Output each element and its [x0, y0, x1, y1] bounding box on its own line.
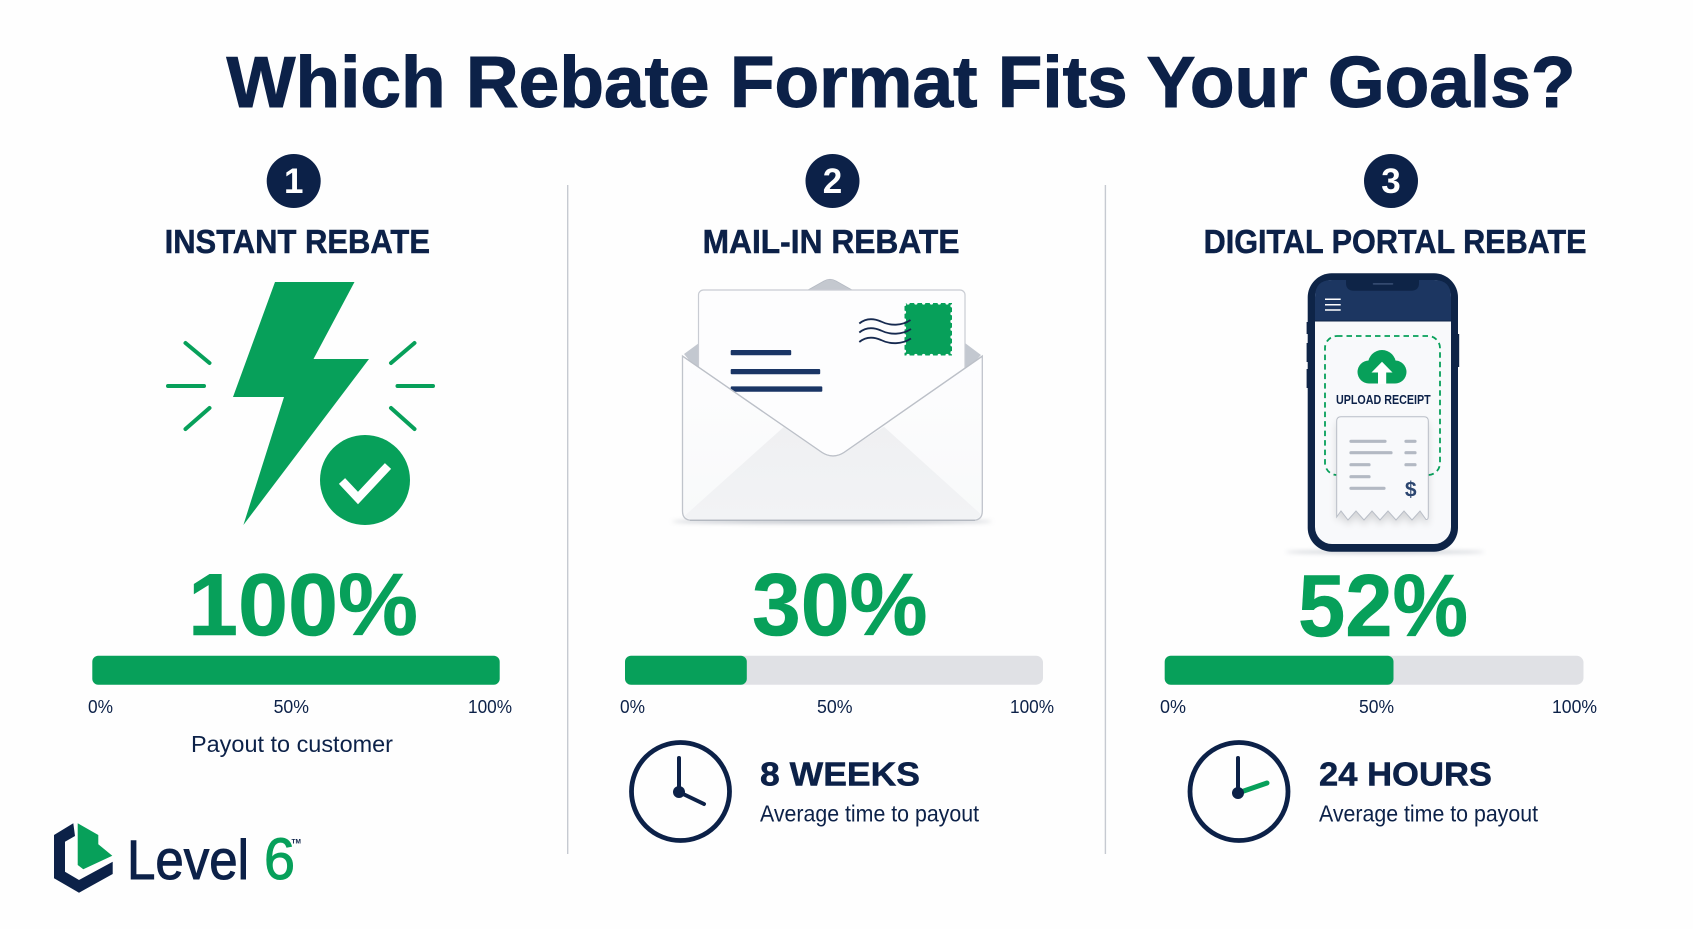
logo: Level 6: TM	[292, 838, 301, 846]
divider left	[567, 185, 568, 854]
icon: phone with upload receipt	[1285, 273, 1485, 554]
axis labels: 0%	[1160, 696, 1186, 717]
payout time: 24 hours: Average time to payout	[1319, 800, 1539, 826]
stat: 100%: 100%	[188, 555, 418, 654]
axis labels: 50%	[1359, 696, 1394, 717]
axis labels: 50%	[274, 696, 309, 717]
heading: digital portal rebate: DIGITAL PORTAL REBATE	[1204, 223, 1587, 260]
axis labels	[1160, 696, 1597, 717]
number badge 2	[806, 154, 860, 208]
caption: payout to customer: Payout to customer	[191, 731, 393, 757]
axis labels	[620, 696, 1054, 717]
axis labels: 100%	[468, 696, 512, 717]
icon: clock twenty-four hours	[1190, 742, 1288, 840]
icon: clock eight weeks	[632, 742, 730, 840]
icon: lightning bolt with check	[168, 282, 433, 525]
payout time: 24 hours: 24 HOURS	[1319, 756, 1492, 793]
number badge 1: 1	[284, 162, 303, 201]
progress bar: 52%	[1165, 656, 1584, 685]
divider right	[1105, 185, 1106, 854]
icon: envelope with letter	[672, 279, 992, 523]
payout time: 24 hours	[1319, 756, 1539, 826]
axis labels: 100%	[1010, 696, 1054, 717]
stat: 52%: 52%	[1298, 556, 1468, 655]
logo: Level 6: 6	[264, 827, 295, 892]
title: Which Rebate Format Fits Your Goals?	[226, 43, 1576, 123]
panel: mail-in rebate	[620, 154, 1054, 840]
payout time: 8 weeks: Average time to payout	[760, 800, 980, 826]
logo: Level 6	[54, 823, 301, 893]
panel: instant rebate	[88, 154, 512, 757]
progress bar: 100%	[92, 656, 500, 685]
number badge 3	[1364, 154, 1418, 208]
icon: phone with upload receipt: $	[1405, 478, 1417, 502]
axis labels: 50%	[817, 696, 852, 717]
payout time: 8 weeks	[760, 756, 980, 826]
number badge 2: 2	[823, 162, 842, 201]
number badge 3: 3	[1381, 162, 1401, 201]
payout time: 8 weeks: 8 WEEKS	[760, 756, 920, 793]
icon: phone with upload receipt: UPLOAD RECEIPT	[1336, 393, 1431, 407]
panel: digital portal rebate	[1160, 154, 1597, 840]
axis labels: 0%	[620, 696, 645, 717]
heading: mail-in rebate: MAIL-IN REBATE	[703, 223, 960, 260]
axis labels	[88, 696, 512, 717]
logo: Level 6: Level	[127, 828, 249, 891]
progress bar: 30%	[625, 656, 1043, 685]
heading: instant rebate: INSTANT REBATE	[165, 223, 430, 260]
stat: 30%: 30%	[752, 555, 928, 654]
number badge 1	[267, 154, 321, 208]
axis labels: 0%	[88, 696, 113, 717]
axis labels: 100%	[1552, 696, 1597, 717]
